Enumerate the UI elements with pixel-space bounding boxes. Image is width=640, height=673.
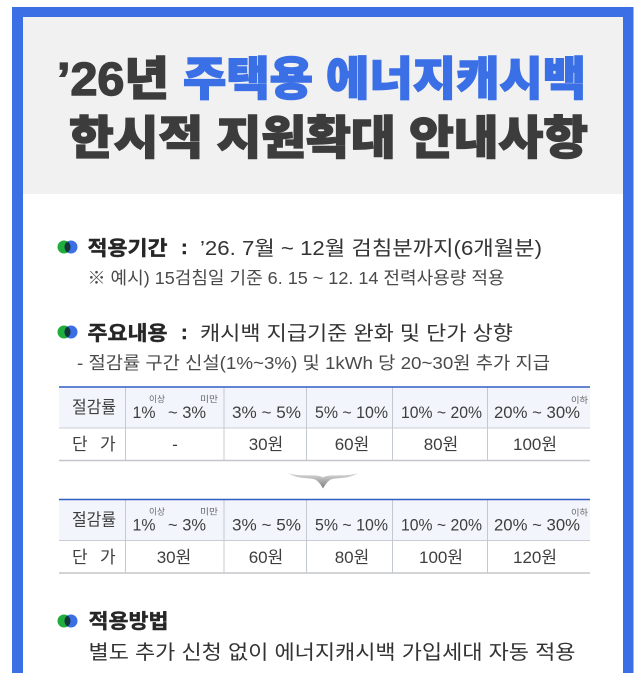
colon: : bbox=[181, 322, 188, 344]
header row bbox=[72, 394, 588, 422]
price row: 80원 bbox=[335, 548, 369, 567]
header row: 미만 bbox=[200, 394, 218, 404]
price row: 60원 bbox=[335, 435, 369, 454]
header row: 미만 bbox=[200, 506, 218, 516]
header row: 이상 bbox=[149, 394, 165, 404]
header row: 절감률 bbox=[72, 510, 116, 530]
main content text: 캐시백 지급기준 완화 및 단가 상향 bbox=[200, 322, 513, 345]
icon: overlapping circles bbox=[58, 326, 78, 338]
header row: 20% ~ 30% bbox=[494, 516, 580, 534]
table: after bbox=[59, 500, 590, 573]
header row: 1% bbox=[132, 516, 156, 534]
title panel bbox=[23, 17, 623, 194]
price row: 30원 bbox=[157, 548, 191, 567]
title line 2: 한시적 지원확대 안내사항 bbox=[69, 112, 588, 164]
heading: main content: 주요내용 bbox=[88, 322, 168, 345]
header row: 5% ~ 10% bbox=[315, 516, 388, 534]
price row: 가 bbox=[100, 548, 116, 567]
price row: 30원 bbox=[249, 435, 283, 454]
price row: - bbox=[172, 435, 178, 454]
header row: 절감률 bbox=[72, 398, 116, 417]
heading: application period: 적용기간 bbox=[88, 237, 168, 260]
price row: 단 bbox=[72, 435, 88, 454]
section: application method bbox=[58, 610, 576, 664]
header row: 3% ~ 5% bbox=[232, 516, 301, 534]
price row bbox=[72, 435, 557, 454]
period text: ’26. 7월 ~ 12월 검침분까지(6개월분) bbox=[200, 237, 542, 260]
header row: 이상 bbox=[149, 506, 165, 516]
header row: 이하 bbox=[571, 508, 588, 518]
price row: 100원 bbox=[513, 435, 557, 454]
period example note: ※ 예시) 15검침일 기준 6. 15 ~ 12. 14 전력사용량 적용 bbox=[88, 268, 505, 288]
title line 1 dark part: ’26년 bbox=[57, 53, 169, 105]
price row: 120원 bbox=[513, 548, 557, 567]
header row: ~ 3% bbox=[168, 403, 206, 422]
header row: 10% ~ 20% bbox=[401, 403, 482, 422]
arrow: down bracket bbox=[288, 473, 358, 488]
header row: 20% ~ 30% bbox=[494, 403, 580, 422]
main content detail: - 절감률 구간 신설(1%~3%) 및 1kWh 당 20~30원 추가 지급 bbox=[77, 353, 550, 373]
colon: : bbox=[181, 237, 188, 259]
price row: 100원 bbox=[419, 548, 463, 567]
price row bbox=[72, 548, 557, 567]
price row: 80원 bbox=[424, 435, 458, 454]
header row: 5% ~ 10% bbox=[315, 403, 388, 422]
price row: 60원 bbox=[249, 548, 283, 567]
table: before bbox=[59, 387, 590, 460]
icon: overlapping circles bbox=[58, 614, 78, 628]
section: application period bbox=[58, 237, 542, 288]
method text: 별도 추가 신청 없이 에너지캐시백 가입세대 자동 적용 bbox=[88, 641, 576, 664]
section: main content bbox=[58, 322, 550, 373]
header row: 3% ~ 5% bbox=[232, 403, 301, 422]
header row: 1% bbox=[132, 403, 156, 422]
icon: overlapping circles bbox=[58, 240, 78, 254]
header row: 10% ~ 20% bbox=[401, 516, 482, 534]
header row: 이하 bbox=[571, 395, 588, 405]
price row: 가 bbox=[100, 435, 116, 454]
heading: application method: 적용방법 bbox=[88, 610, 168, 633]
title line 1 blue part: 주택용 에너지캐시백 bbox=[183, 53, 586, 105]
header row bbox=[72, 506, 588, 534]
header row: ~ 3% bbox=[168, 516, 206, 534]
price row: 단 bbox=[72, 548, 88, 567]
